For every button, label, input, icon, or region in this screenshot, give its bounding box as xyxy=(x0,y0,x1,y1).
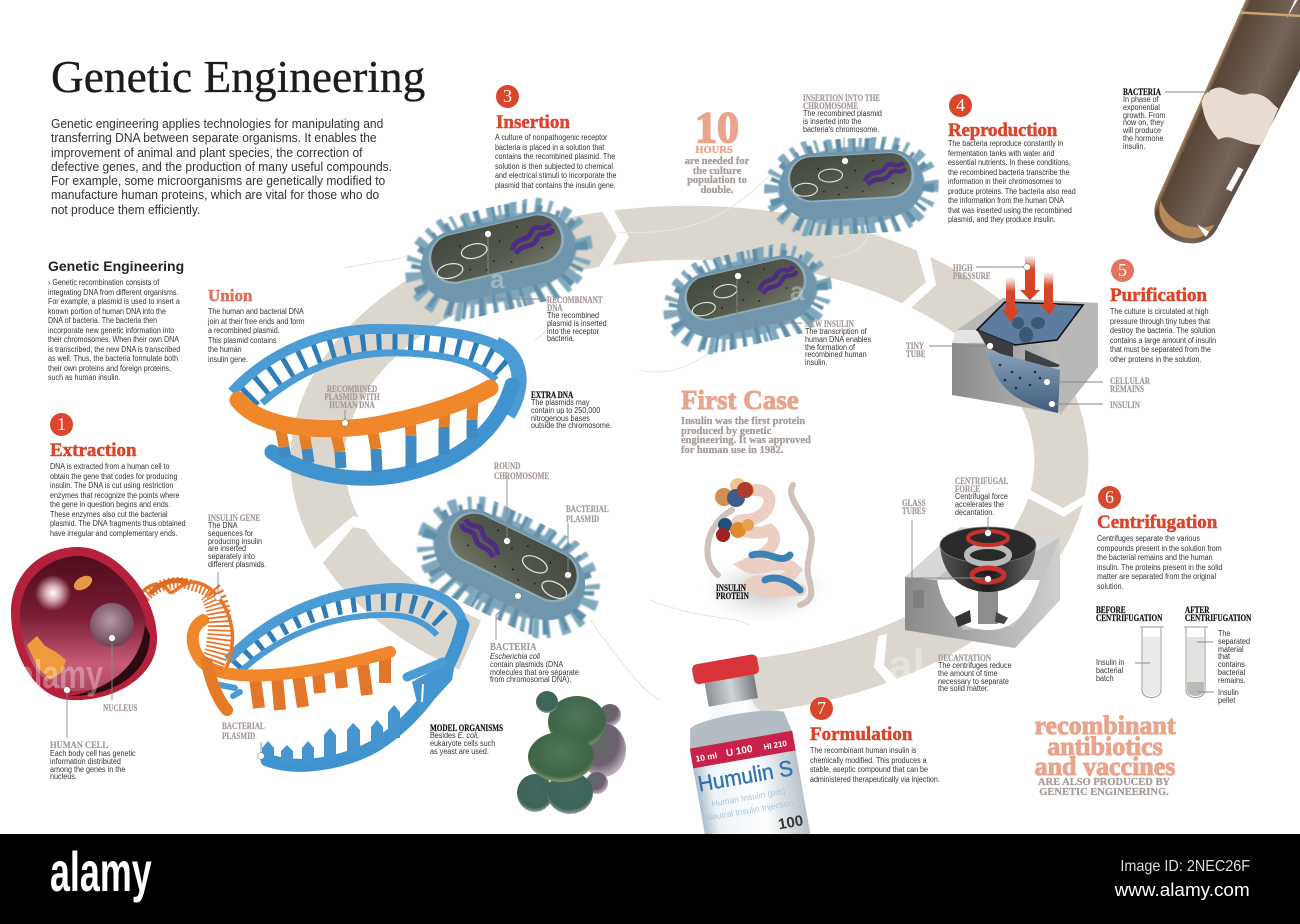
label: glass tubes: GLASS TUBES xyxy=(902,498,926,516)
panel: step 6 centrifugation xyxy=(1097,486,1222,591)
label: insulin gene: The DNA sequences for producing insulin are inserted separately into different plasmids. xyxy=(208,521,266,569)
callout: first case: First Case xyxy=(681,385,799,415)
label: model organisms xyxy=(430,723,503,756)
recombined plasmid xyxy=(232,329,519,478)
panel: step 5 purification xyxy=(1110,259,1216,364)
vial: Humulin S: Humulin S xyxy=(696,755,795,797)
panel: step 7 formulation xyxy=(810,697,940,784)
label: bacteria: BACTERIA xyxy=(490,641,536,653)
label: model organisms: Besides E. coli, eukaryote cells such as yeast are used. xyxy=(430,731,495,756)
stock watermark: a xyxy=(790,276,805,306)
stock watermark xyxy=(17,264,925,697)
vial: Humulin S: Neutral Insulin Injection xyxy=(705,798,794,823)
heading: reproduction: Reproduction xyxy=(948,120,1057,141)
bacterial plasmid with insulin gene xyxy=(193,588,463,765)
vial: Humulin S: 10 ml xyxy=(695,750,718,764)
label: insertion into the chromosome xyxy=(803,93,882,134)
label: insertion into the chromosome: INSERTION INTO THE CHROMOSOME xyxy=(803,93,880,111)
vial: Humulin S xyxy=(676,650,823,924)
label: recombined plasmid: RECOMBINED PLASMID WITH HUMAN DNA xyxy=(324,384,380,410)
bacterium: receptor with plasmids xyxy=(416,491,601,642)
step number 6 xyxy=(1098,486,1121,509)
icon: test tube with bacteria xyxy=(1145,0,1300,262)
flagella strokes xyxy=(345,175,871,700)
label: round chromosome: ROUND CHROMOSOME xyxy=(494,461,549,480)
label: human cell: HUMAN CELL xyxy=(50,740,108,750)
bacterium: insertion into chromosome xyxy=(776,143,927,230)
panel: step 1 extraction xyxy=(50,413,186,538)
label: insulin: INSULIN xyxy=(1110,400,1140,410)
stock watermark: al xyxy=(888,641,925,690)
label: decantation: The centrifuges reduce the amount of time necessary to separate the solid matter. xyxy=(938,661,1012,693)
website: www.alamy.com xyxy=(1115,880,1250,900)
label: insulin pellet: Insulin pellet xyxy=(1218,688,1239,705)
union text: The human and bacterial DNA join at their free ends and form a recombined plasmid. This plasmid contains the human insulin gene. xyxy=(208,307,305,364)
sidebar heading: Genetic Engineering xyxy=(48,258,184,274)
label: decantation: DECANTATION xyxy=(938,653,991,663)
bacterium: insertion stage xyxy=(411,199,586,319)
label: insertion into the chromosome: The recombined plasmid is inserted into the bacteria's chromosome. xyxy=(803,109,882,134)
label: new insulin: NEW INSULIN xyxy=(805,319,854,329)
callout: recombinant antibiotics and vaccines: ARE ALSO PRODUCED BY GENETIC ENGINEERING. xyxy=(1038,777,1170,798)
step number 3 xyxy=(496,85,519,108)
label: model organisms: MODEL ORGANISMS xyxy=(430,723,503,733)
callout: first case xyxy=(680,385,811,456)
step number 5 xyxy=(1111,259,1134,282)
label: after centrifugation: AFTER CENTRIFUGATION xyxy=(1185,605,1251,623)
label: human cell: Each body cell has genetic information distributed among the genes in the nucleus. xyxy=(50,749,136,781)
arrows: high pressure xyxy=(1002,256,1057,322)
leader lines xyxy=(67,92,1214,756)
vial: Humulin S: 100 xyxy=(777,812,804,833)
purification chamber xyxy=(952,256,1098,415)
label: new insulin: The transcription of human DNA enables the formation of recombined human insulin. xyxy=(805,327,871,367)
bottom stock bar xyxy=(0,834,1300,924)
icon: yeast cells xyxy=(517,691,626,814)
stat: 10 hours: are needed for the culture population to double. xyxy=(685,156,749,196)
label: insulin protein: INSULIN PROTEIN xyxy=(716,583,749,601)
icon: human cell xyxy=(11,547,157,700)
bar logo: alamy xyxy=(50,840,152,903)
sidebar text: › Genetic recombination consists of integrating DNA from different organisms. For example, a plasmid is used to insert a known portion of human DNA into the DNA of bacteria. The bacteria then incorporate new genetic information into their chromosomes. When their own DNA is transcribed, the new DNA is transcribed as well. Thus, the bacteria formulate both their own proteins and foreign proteins, such as human insulin. xyxy=(48,278,180,382)
stock watermark: a xyxy=(490,264,505,294)
heading: purification: Purification xyxy=(1110,285,1207,306)
label: bacteria: Escherichia coli contain plasmids (DNA molecules that are separate from chromosomal DNA). xyxy=(490,652,579,684)
callout: extra DNA: EXTRA DNA xyxy=(531,390,573,400)
heading: extraction: Extraction xyxy=(50,440,137,461)
callout: recombinant antibiotics and vaccines: recombinant antibiotics and vaccines xyxy=(1034,711,1176,781)
formulation text: The recombinant human insulin is chemically modified. This produces a stable, aseptic compound that can be administered therapeutically via injection. xyxy=(810,746,940,784)
label: centrifugal force: CENTRIFUGAL FORCE xyxy=(955,476,1008,494)
label: centrifugal force: Centrifugal force accelerates the decantation. xyxy=(955,492,1008,517)
label: bacterial plasmid left: BACTERIAL PLASMID xyxy=(222,721,265,740)
callout dots xyxy=(64,158,1055,759)
label: high pressure: HIGH PRESSURE xyxy=(953,263,991,281)
centrifugation text: Centrifuges separate the various compounds present in the solution from the bacterial remains and the human insulin. The proteins present in the solid matter are separated from the original solution. xyxy=(1097,534,1222,591)
label: bacteria in tube: In phase of exponential growth. From now on, they will produce the hormone insulin. xyxy=(1123,95,1165,151)
step number 1: 1 xyxy=(57,414,66,434)
label: insulin gene: INSULIN GENE xyxy=(208,513,260,523)
title: Genetic Engineering xyxy=(51,52,425,102)
step number 4: 4 xyxy=(956,95,965,115)
bacterium: new insulin xyxy=(669,244,826,352)
label: cellular remains: CELLULAR REMAINS xyxy=(1110,376,1150,394)
background cycle arrow ring xyxy=(310,200,1098,694)
step number 7: 7 xyxy=(817,698,826,718)
intro paragraph: Genetic engineering applies technologies for manipulating and transferring DNA between separate organisms. It enables the improvement of animal and plant species, the correction of defective genes, and the production of many useful compounds. For example, some microorganisms are genetically modified to manufacture human proteins, which are vital for those who do not produce them efficiently. xyxy=(51,117,392,217)
label: recombinant DNA xyxy=(547,295,607,343)
heading: insertion: Insertion xyxy=(496,112,570,133)
label: recombinant DNA: The recombined plasmid is inserted into the receptor bacteria. xyxy=(547,311,607,343)
step number 3: 3 xyxy=(503,86,512,106)
union heading: Union xyxy=(208,286,252,305)
step number 6: 6 xyxy=(1105,487,1114,507)
heading: centrifugation: Centrifugation xyxy=(1097,512,1217,533)
label: insulin in bacterial batch: Insulin in bacterial batch xyxy=(1096,658,1124,683)
panel: step 4 reproduction xyxy=(948,94,1076,224)
callout: first case: Insulin was the first protein produced by genetic engineering. It was approved for human use in 1982. xyxy=(681,416,811,456)
purification text: The culture is circulated at high pressure through tiny tubes that destroy the bacteria. The solution contains a large amount of insulin that must be separated from the other proteins in the solution. xyxy=(1110,307,1216,364)
DNA helix: insulin gene xyxy=(128,580,232,668)
centrifuge xyxy=(905,527,1060,648)
step number 4 xyxy=(949,94,972,117)
heading: formulation: Formulation xyxy=(810,724,912,745)
extraction text: DNA is extracted from a human cell to obtain the gene that codes for producing insulin. The DNA is cut using restriction enzymes that recognize the points where the gene in question begins and ends. These enzymes also cut the bacterial plasmid. The DNA fragments thus obtained have irregular and complementary ends. xyxy=(50,462,186,538)
step number 5: 5 xyxy=(1118,260,1127,280)
vial: Humulin S: HI 210 xyxy=(763,739,788,752)
test tubes: before and after xyxy=(1140,627,1208,698)
step number 1 xyxy=(50,413,73,436)
insertion text: A culture of nonpathogenic receptor bacteria is placed in a solution that contains the recombined plasmid. The solution is then subjected to chemical and electrical stimuli to incorporate the plasmid that contains the insulin gene. xyxy=(495,133,616,190)
image id: Image ID: 2NEC26F xyxy=(1120,858,1250,875)
label: recombinant DNA: RECOMBINANT DNA xyxy=(547,295,603,313)
stat: 10 hours: 10 xyxy=(695,103,739,152)
label: bacterial plasmid right: BACTERIAL PLASMID xyxy=(566,504,609,524)
vial: Humulin S: U 100 xyxy=(725,744,754,759)
label: before centrifugation: BEFORE CENTRIFUGATION xyxy=(1096,605,1162,623)
label: separated material: The separated material that contains bacterial remains. xyxy=(1218,629,1250,685)
reproduction text: The bacteria reproduce constantly in fermentation tanks with water and essential nutrients. In these conditions, the recombined bacteria transcribe the information in their chromosomes to produce proteins. The bacteria also read the information from the human DNA that was inserted using the recombined plasmid, and they produce insulin. xyxy=(948,139,1076,224)
label: centrifugal force xyxy=(955,476,1008,517)
label: nucleus: NUCLEUS xyxy=(103,703,137,713)
callout: extra DNA: The plasmids may contain up to 250,000 nitrogenous bases outside the chromosome. xyxy=(531,398,612,430)
step number 7 xyxy=(810,697,833,720)
vial: Humulin S: Human Insulin (prb) xyxy=(711,786,786,809)
icon: insulin protein xyxy=(703,478,827,622)
stock watermark: alamy xyxy=(17,653,104,697)
label: bacteria in tube: BACTERIA xyxy=(1123,87,1161,97)
label: tiny tube: TINY TUBE xyxy=(906,341,926,359)
panel: step 3 insertion xyxy=(495,85,616,190)
stat: 10 hours: HOURS xyxy=(695,145,733,156)
stat: 10 hours xyxy=(684,103,750,196)
